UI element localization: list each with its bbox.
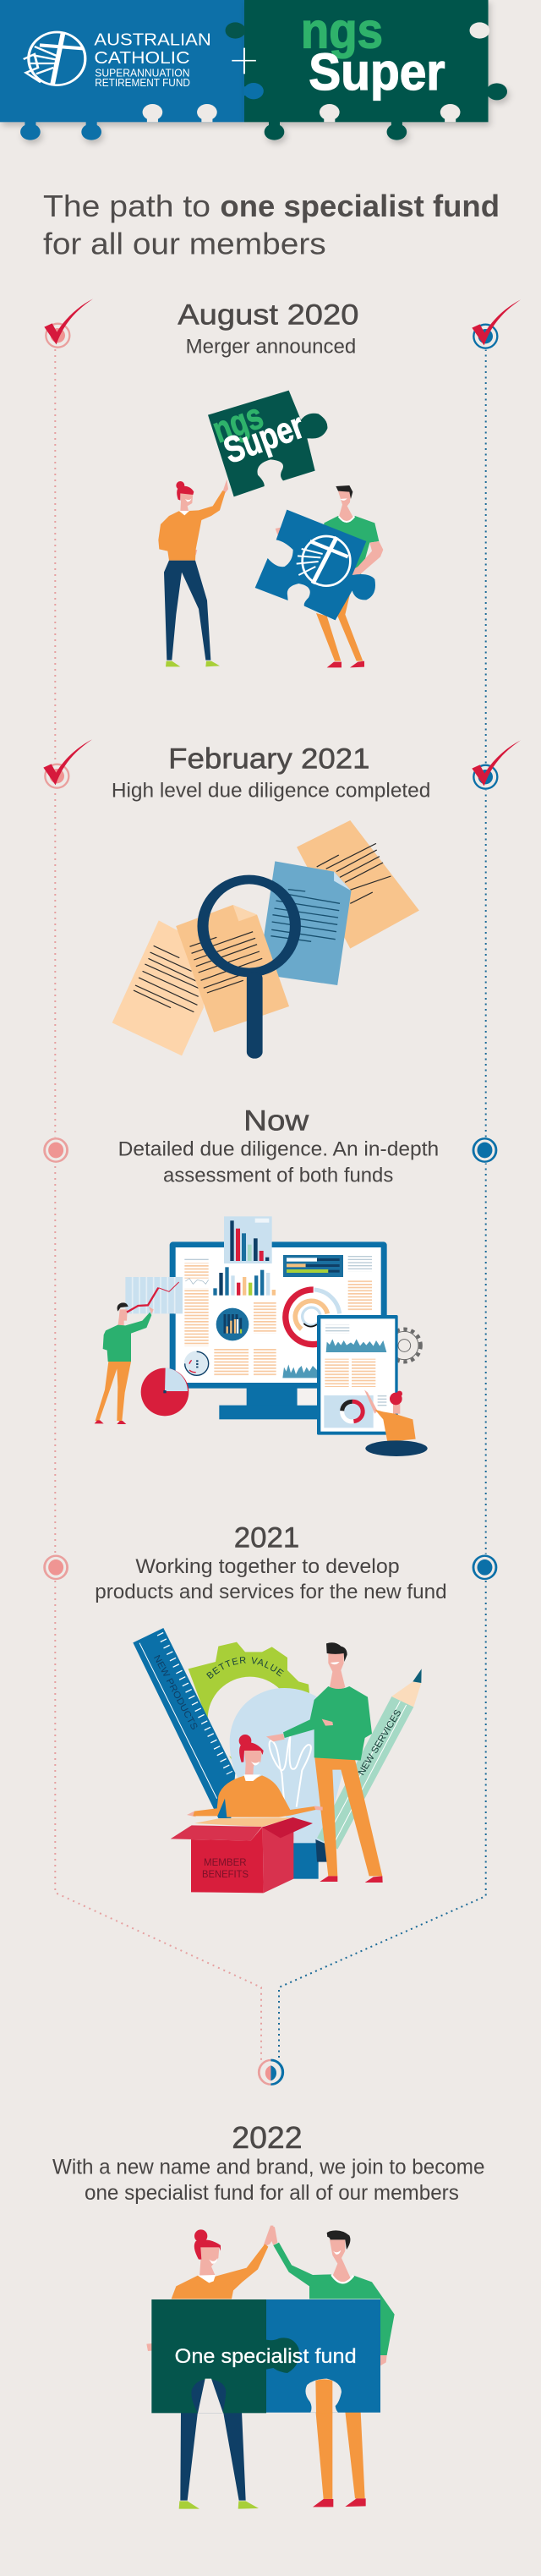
milestone text: 2022: 2022: [232, 2121, 303, 2155]
illustration: two people high-fiving behind joined puzzle: [146, 2226, 395, 2509]
milestone text: August 2020: Merger announced: [186, 335, 356, 358]
panel: blue puzzle piece with Australian Catholic logo: [0, 0, 244, 140]
logo text: Australian Catholic: RETIREMENT FUND: [95, 77, 190, 90]
milestone text: August 2020: [178, 299, 358, 358]
icon: ruler: [133, 1628, 235, 1818]
icon: merged marker: [257, 2060, 285, 2087]
person: woman in orange: [158, 480, 228, 666]
person: man in green: [270, 2226, 395, 2507]
icon: right upcoming marker: [472, 1554, 498, 1581]
icon: red box: BENEFITS: [202, 1868, 249, 1880]
monitor: frame and stand: [170, 1241, 387, 1419]
puzzle label: One specialist fund: [175, 2345, 357, 2368]
document: back orange page: [297, 820, 419, 949]
icon: magnifying glass: [203, 880, 295, 1052]
icon: pie chart: [141, 1367, 189, 1416]
panel: tablet: [317, 1315, 398, 1435]
milestone text: 2021: Working together to develop: [135, 1555, 400, 1577]
chart: horizontal bars panel: [283, 1255, 343, 1277]
icon: left upcoming marker: [43, 1554, 69, 1581]
logo text: ngs Super: ngs: [301, 3, 383, 59]
icon: left progress marker: [43, 1137, 69, 1164]
milestone text: Now: [118, 1104, 439, 1187]
notch showing man's legs: [305, 2379, 342, 2413]
icon: left checked marker, August 2020: [44, 299, 93, 349]
icon: right checked marker, February 2021: [472, 740, 521, 791]
timeline: left dotted path: [55, 349, 261, 2061]
illustration: monitor with charts and people: [95, 1216, 428, 1456]
person: woman in box: [187, 1735, 323, 1817]
chart: concentric donut: [286, 1290, 340, 1345]
person: woman in orange: [146, 2226, 273, 2509]
illustration: documents under magnifying glass: [112, 820, 419, 1055]
person: seated woman pointing at tablet: [364, 1389, 428, 1456]
icon: cross logo: [24, 32, 85, 85]
icon: blue puzzle piece with logo: [255, 510, 375, 620]
logo text: ngs Super: Super: [309, 43, 445, 101]
logo text: Australian Catholic: CATHOLIC: [94, 47, 189, 67]
milestone text: Now: Now: [243, 1104, 309, 1137]
milestone text: 2022: one specialist fund for all of our members: [85, 2181, 459, 2204]
person: man in green: [276, 485, 383, 667]
title: for all our members: [43, 227, 326, 261]
logo text: Australian Catholic: SUPERANNUATION: [95, 68, 189, 79]
milestone text: February 2021: February 2021: [168, 743, 370, 775]
icon: red box: [171, 1817, 313, 1893]
illustration: team building new products in a box: BETTER VALUE: [206, 1657, 284, 1680]
document: blue page: [264, 861, 352, 985]
icon: right progress marker: [472, 1137, 498, 1164]
icon: plus sign: [232, 48, 256, 74]
person: man in green: [266, 1642, 383, 1883]
milestone text: August 2020: August 2020: [178, 299, 358, 331]
logo text: ngs Super: [301, 3, 445, 101]
icon: ruler: NEW PRODUCTS: [151, 1653, 199, 1732]
chart: small spark bars: [282, 1364, 317, 1378]
logo text: Australian Catholic: [94, 30, 211, 90]
person: man in green with trend chart: [95, 1277, 183, 1424]
icon: left checked marker, February 2021: [43, 739, 92, 790]
icon: green NGS Super puzzle piece: [207, 391, 327, 496]
illustration: two people holding puzzle pieces: [158, 391, 383, 667]
panel: joined puzzle with text: [151, 2299, 380, 2413]
document: middle orange page: [176, 905, 289, 1033]
chart: round badge with bars: [216, 1308, 249, 1340]
icon: green NGS Super puzzle piece: Super: [219, 406, 309, 472]
monitor: report text blocks: [184, 1254, 372, 1376]
milestone text: February 2021: [112, 743, 430, 802]
icon: red box: MEMBER: [204, 1856, 247, 1868]
milestone text: February 2021: High level due diligence completed: [112, 779, 430, 802]
milestone text: 2021: 2021: [234, 1521, 299, 1554]
milestone text: Now: assessment of both funds: [163, 1164, 393, 1187]
logo text: Australian Catholic: AUSTRALIAN: [94, 30, 211, 49]
icon: lime gear: [189, 1642, 313, 1768]
chart: small ring: [184, 1351, 210, 1376]
icon: right checked marker, August 2020: [472, 299, 521, 350]
milestone text: 2021: products and services for the new fund: [95, 1581, 447, 1603]
milestone text: Now: Detailed due diligence. An in-depth: [118, 1137, 439, 1160]
timeline: right dotted path: [279, 349, 486, 2061]
curved gear text: [210, 1663, 281, 1680]
icon: pencil: [317, 1669, 422, 1850]
title: The path to: [43, 189, 210, 223]
chart: multicolour bars: [213, 1267, 276, 1296]
icon: gear outline: [388, 1329, 421, 1362]
milestone text: 2022: [52, 2121, 484, 2204]
panel: dark green puzzle piece with NGS Super logo: [226, 0, 507, 140]
notch showing woman's legs: [191, 2379, 226, 2413]
icon: pencil: NEW SERVICES: [357, 1708, 403, 1778]
icon: light bulb: [230, 1688, 346, 1879]
milestone text: 2021: [95, 1521, 447, 1603]
illustration: team building new products in a box: [133, 1628, 422, 1893]
document: light page: [112, 920, 204, 1055]
chart: tall bar chart card: [224, 1216, 272, 1263]
icon: green NGS Super puzzle piece: ngs: [207, 396, 269, 451]
header puzzle banner: [0, 0, 507, 358]
